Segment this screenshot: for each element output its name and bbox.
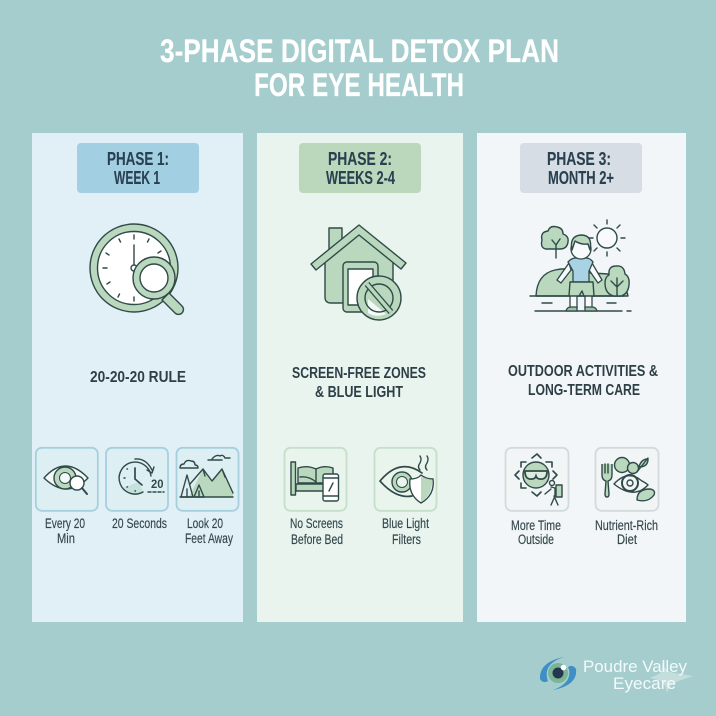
label: more time outside: More Time <box>511 518 561 533</box>
title: FOR EYE HEALTH <box>254 67 464 103</box>
icon: eye with magnifier <box>44 466 88 494</box>
card: 20 seconds <box>106 448 168 531</box>
label: blue light filters <box>382 516 429 547</box>
phase 2 badge: PHASE 2: <box>328 149 392 169</box>
title: 3-PHASE DIGITAL DETOX PLAN <box>160 33 559 69</box>
logo wordmark: Poudre Valley <box>583 657 687 676</box>
phase 1 badge: WEEK 1 <box>114 168 160 188</box>
label: 20 seconds: 20 Seconds <box>112 516 167 531</box>
card: no screens before bed <box>284 448 346 547</box>
phase 2 heading <box>292 365 426 401</box>
phase 3 badge: MONTH 2+ <box>548 168 614 188</box>
label: every 20 min <box>45 516 85 546</box>
panel: phase 1 <box>32 133 243 622</box>
card: every 20 min <box>36 448 98 546</box>
card: nutrient-rich diet <box>595 448 658 547</box>
icon: sun with sunglasses and hiker <box>515 454 562 505</box>
panel: phase 2 <box>257 133 463 622</box>
phase 3 badge: PHASE 3: <box>547 149 611 169</box>
label: no screens before bed: Before Bed <box>291 532 343 547</box>
card: more time outside <box>506 448 568 547</box>
logo: Poudre Valley Eyecare <box>540 657 693 693</box>
panel: phase 3 <box>477 133 686 622</box>
icon: mountains and clouds <box>180 455 233 497</box>
icon: house with blocked tablet <box>311 225 406 320</box>
title <box>160 33 559 103</box>
phase 3 heading: OUTDOOR ACTIVITIES & <box>508 363 658 380</box>
label: nutrient-rich diet: Nutrient-Rich <box>595 518 658 533</box>
label: more time outside <box>511 518 561 547</box>
icon: clock with magnifying glass <box>90 224 183 314</box>
phase 1 badge: PHASE 1: <box>107 149 169 169</box>
phase 3 heading: LONG-TERM CARE <box>528 382 640 399</box>
label: look 20 feet away: Feet Away <box>185 531 233 546</box>
label: no screens before bed <box>290 516 343 547</box>
label: nutrient-rich diet <box>595 518 658 547</box>
label: no screens before bed: No Screens <box>290 516 343 531</box>
label: look 20 feet away <box>185 516 233 546</box>
label: more time outside: Outside <box>518 532 554 547</box>
icon: person outdoors <box>530 220 631 311</box>
card: look 20 feet away <box>176 448 238 546</box>
icon: bed and phone <box>291 462 338 501</box>
card: blue light filters <box>374 448 436 547</box>
phase 2 badge: WEEKS 2-4 <box>326 168 395 188</box>
icon: fork, eye and produce <box>602 458 654 501</box>
logo watermark star <box>650 663 693 693</box>
logo wordmark: Eyecare <box>613 674 676 693</box>
phase 2 heading: SCREEN-FREE ZONES <box>292 365 426 382</box>
phase 3 badge <box>520 143 642 193</box>
phase 1 badge <box>77 143 199 193</box>
label: every 20 min: Every 20 <box>45 516 85 531</box>
icon: eye with shield <box>380 456 433 503</box>
phase 2 badge <box>299 143 421 193</box>
label: blue light filters: Blue Light <box>382 516 429 531</box>
phase 1 heading: 20-20-20 RULE <box>90 369 186 386</box>
label: blue light filters: Filters <box>392 532 421 547</box>
phase 2 heading: & BLUE LIGHT <box>315 384 403 401</box>
label: nutrient-rich diet: Diet <box>617 532 637 547</box>
logo eye mark <box>540 657 576 690</box>
icon: timer clock: 20 <box>151 477 164 491</box>
label: look 20 feet away: Look 20 <box>187 516 223 531</box>
phase 3 heading <box>508 363 658 399</box>
logo wordmark <box>583 657 687 693</box>
label: every 20 min: Min <box>57 531 75 546</box>
